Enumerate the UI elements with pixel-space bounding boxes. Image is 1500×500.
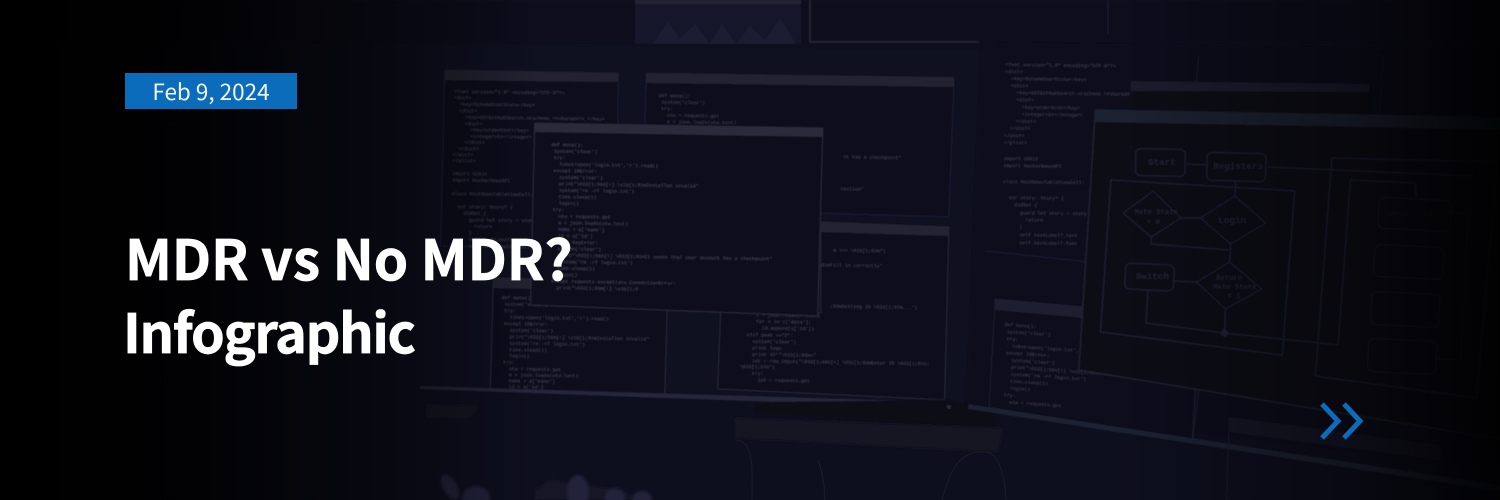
right monitor: xml window: </dict>	[1004, 133, 1025, 139]
window: python code centre: time.sleep(1)	[548, 266, 595, 272]
window: python code lower left: a = json.loads(otw.text)	[500, 372, 579, 379]
window: python code lower left: system('clear')	[501, 328, 553, 334]
window: xml code top left: </dict>	[453, 146, 479, 152]
window: python code top right: nection"	[841, 186, 864, 193]
window: python code lower right: \033[1;97m")	[740, 364, 775, 371]
window: python code centre: except IOError:	[551, 168, 597, 175]
right monitor: lower left code window: otw = requests.get	[1000, 399, 1062, 409]
window: python code lower left: system('rm -rf login.txt')	[501, 341, 585, 348]
hand	[437, 471, 652, 500]
window: xml code top left: <key>orderHint</key>	[453, 127, 529, 134]
window: python code lower right	[718, 222, 949, 400]
right monitor: lower left code window: def menu():	[1004, 322, 1037, 330]
right monitor: xml window: <dict>	[1005, 97, 1034, 103]
right monitor: lower left code window: system('clear')	[1004, 329, 1051, 338]
window: python code lower left	[490, 278, 668, 397]
window: xml code top left: <dict>	[454, 108, 477, 114]
flowchart labels: Mate State	[1135, 209, 1178, 217]
icon: double chevron arrow	[1320, 402, 1364, 440]
window: python code lower left: try:	[500, 360, 515, 366]
flowchart diagram	[1100, 149, 1497, 398]
background window behind flowchart	[1130, 55, 1384, 118]
right monitor: xml window: <dict>	[1005, 83, 1028, 89]
window: python code centre: otw = requests.get	[550, 214, 611, 221]
window: python code lower right: print logo	[746, 345, 782, 352]
window: python code lower left: print"\033[1;96m[!] \x1b[1;91mInstallan invalid"	[501, 334, 649, 343]
right monitor: xml window: <key>SchemeUserState</key>	[1005, 76, 1087, 83]
right monitor	[966, 42, 1500, 500]
window: python code centre: nama = a['name']	[549, 227, 605, 233]
window: python code lower right: m >>> \033[1;97m")	[833, 248, 886, 255]
right monitor: xml window: didSet {	[1003, 202, 1038, 208]
right monitor: xml window: </plist>	[1004, 140, 1027, 146]
right monitor: xml window: guard let story = story	[1002, 210, 1087, 217]
window: python code lower left: id = a['id']	[500, 384, 543, 391]
right monitor: xml window: </dict>	[1004, 119, 1036, 125]
title: MDR vs No MDR?	[125, 216, 573, 296]
window: xml code top left: import UIKit	[452, 171, 487, 177]
right monitor: xml window: </dict>	[1004, 126, 1031, 132]
flowchart labels: = 0	[1147, 219, 1160, 227]
window: python code centre	[531, 123, 823, 316]
window: xml code top left: <integer>64</integer>	[453, 134, 532, 141]
date badge	[125, 73, 297, 109]
right monitor: xml window: <dict>	[1005, 69, 1023, 75]
title	[123, 216, 573, 369]
right monitor: xml window: class HackNewsTableViewCell:	[1003, 179, 1084, 186]
right monitor: lower left code window: try:	[1004, 336, 1018, 343]
window: python code lower left: except IOError:	[501, 321, 548, 328]
flowchart labels: Return	[1216, 275, 1242, 283]
right monitor: lower left code window: toket=open('login.txt','r').read()	[1003, 343, 1111, 356]
right monitor: lower left code window: time.sleep(1)	[1001, 378, 1048, 387]
desk cables	[735, 440, 1006, 500]
right monitor: xml window: <?xml version="1.0" encoding="UTF-8"?>	[1005, 62, 1116, 69]
right monitor: xml window: <key>orderHint</key>	[1005, 105, 1080, 111]
right monitor: xml window	[966, 42, 1500, 470]
window: python code lower left: time.sleep(1)	[500, 347, 547, 354]
monitor left bezel	[418, 45, 998, 412]
window: python code centre: print"\033[1;96m[!] \033[1;91mIt seems that your account has a checkpoint"	[549, 253, 773, 262]
window: python code centre: system('rm -rf login.txt')	[548, 259, 633, 266]
right monitor: lower left code window: system('clear')	[1003, 357, 1055, 367]
window: python code top right: otw = requests.get	[658, 113, 719, 120]
desk keyboard	[426, 404, 1003, 452]
right monitor: xml window: var story: Story? {	[1003, 195, 1064, 202]
window: python code lower left: toket=open('login.txt','r').read()	[501, 315, 609, 322]
window: python code centre: login()	[548, 272, 578, 278]
window: xml code top left: class HackNewsTableViewCell: UITableViewCell {	[452, 191, 586, 199]
right monitor: lower left code window	[989, 299, 1208, 440]
window: python code top right: nt has a checkpoint"	[843, 154, 902, 161]
flowchart window	[1079, 110, 1500, 442]
flowchart labels: Registers	[1213, 161, 1263, 172]
right monitor: xml window: <integer>64</integer>	[1004, 112, 1083, 119]
window: python code centre: system('clear')	[551, 149, 598, 155]
window: python code centre: print"\033[1;96m[!] \x1b[1;91mInstallan invalid"	[550, 181, 699, 190]
window: xml code top left: guard let story = story	[451, 217, 536, 224]
window: python code lower right: ;93mGetting ID \033[1;97m...')	[830, 304, 917, 311]
window: python code lower right: for s in z['data']:	[753, 319, 811, 326]
window: python code lower right: system('clear')	[747, 339, 796, 345]
window: xml code top left: self.textLabel?.font	[451, 243, 527, 250]
window: xml code top left: import HackerNewsAPI	[452, 178, 511, 184]
date badge: Feb 9, 2024	[152, 75, 270, 107]
title: Infographic	[123, 290, 415, 369]
window: xml code top left: <key>GSTGitHubSearch.xcscheme_^#shared#^#_</key>	[454, 115, 605, 123]
window: python code lower right: jok = requests.get	[746, 377, 810, 384]
flowchart labels: Start	[1148, 157, 1176, 168]
window: xml code top left: <?xml version="1.0" encoding="UTF-8"?>	[454, 89, 565, 96]
window: python code centre: except requests.exceptions.ConnectionError:	[548, 279, 676, 287]
top screens	[0, 0, 1500, 44]
window: python code centre: a = json.loads(otw.text)	[549, 220, 628, 227]
window: python code top right: def menu():	[659, 93, 691, 100]
window: xml code top left: var story: Story? {	[452, 204, 513, 211]
right monitor: xml window: <key>GSTGitHubSearch.xcscheme_^#shared#^#_	[1005, 90, 1139, 98]
window: python code lower left: try:	[501, 308, 516, 314]
window: xml code top left: </plist>	[453, 158, 476, 164]
window: xml code top left: <dict>	[453, 121, 483, 127]
right monitor: xml window: return	[1002, 217, 1043, 224]
left monitor	[418, 45, 998, 430]
window: python code centre: system('rm -rf login.txt')	[550, 188, 635, 195]
window: python code top right	[643, 73, 954, 217]
window: python code centre: except KeyError:	[549, 240, 598, 246]
right monitor: xml window: self.textLabel?.text	[1002, 232, 1078, 239]
window: python code centre: def menu():	[551, 142, 583, 149]
window: python code centre: login()	[550, 201, 579, 207]
right monitor: xml window: import UIKit	[1003, 156, 1039, 162]
window: python code lower right: ;91mFill in correctly"	[818, 262, 883, 269]
window: xml code top left: </dict>	[453, 152, 473, 158]
right monitor: xml window: }	[1002, 224, 1023, 230]
right monitor: lower left code window: try:	[1001, 392, 1016, 399]
monitor bottom edge	[420, 386, 996, 430]
right monitor: bottom edge and lower code window	[968, 388, 1500, 500]
window: python code lower left: otw = requests.get	[500, 366, 561, 373]
flowchart labels	[1135, 157, 1433, 301]
window: python code top right: try:	[658, 106, 673, 112]
flowchart labels: = 1	[1228, 293, 1241, 301]
window: python code top right: a = json.loads(otw.text)	[658, 119, 737, 126]
window: python code lower left: login()	[500, 353, 530, 359]
window: xml code top left: didSet {	[452, 211, 487, 217]
window: python code centre: try:	[551, 155, 566, 161]
window: xml code top left: }	[451, 230, 472, 236]
window: python code lower right: id.append(s['id'])	[753, 325, 814, 332]
window: python code centre: id = a['id']	[549, 233, 593, 240]
flowchart labels: MMVA Lg+1	[1389, 211, 1433, 220]
window: python code lower left: nama = a['name']	[500, 378, 555, 385]
window: python code lower right: print 42*"\033[1;96m="	[746, 352, 816, 359]
flowchart labels: Login	[1218, 215, 1246, 226]
right monitor: lower left code window: except IOError:	[1003, 350, 1050, 359]
window: python code centre: print"\033[1;96m[!] \x1b[1;9	[548, 285, 638, 293]
flowchart diagram right column	[1367, 197, 1468, 375]
flowchart labels: Switch	[1136, 271, 1169, 282]
window: python code lower right: try:	[746, 371, 763, 377]
window: python code centre: system('clear')	[549, 246, 601, 253]
window: xml code top left: <dict>	[454, 95, 472, 101]
window: python code lower left: def menu():	[502, 295, 534, 302]
right monitor: lower left code window: print"\033[1;96m[!] \x1b[1;91mInstallan invalid"	[1002, 364, 1151, 380]
window: python code centre: system('clear')	[550, 175, 603, 181]
window: python code lower right: idt = raw_input("\033[1;96m[+] \033[1;93mEnter ID \033[1;91m:	[746, 358, 929, 367]
right monitor: lower left code window: login()	[1001, 385, 1031, 393]
window: xml code top left: <key>SchemeUserState</key>	[454, 102, 535, 109]
window: python code lower right: z = json.loads(r.text)	[753, 312, 820, 319]
window: xml code top left	[441, 70, 618, 251]
window: python code centre: try:	[550, 207, 564, 213]
window: python code lower right: elif peak =="2":	[747, 332, 793, 339]
window: python code lower left: system('clear')	[501, 302, 548, 308]
flowchart labels: Mate State	[1213, 284, 1256, 292]
right monitor: xml window: self.textLabel?.font	[1002, 240, 1078, 247]
window: xml code top left: return	[451, 224, 492, 230]
window: xml code top left: self.textLabel?.text	[451, 237, 527, 243]
right monitor: lower left code window: system('rm -rf login.txt')	[1002, 371, 1086, 383]
right monitor: xml window: import HackerNewsAPI	[1003, 163, 1062, 170]
window: xml code top left: </dict>	[453, 140, 485, 146]
window: python code top right: system('clear')	[658, 100, 705, 106]
window: python code centre: time.sleep(1)	[550, 194, 597, 201]
window: python code centre: toket=open('login.txt','r').read()	[551, 162, 658, 169]
